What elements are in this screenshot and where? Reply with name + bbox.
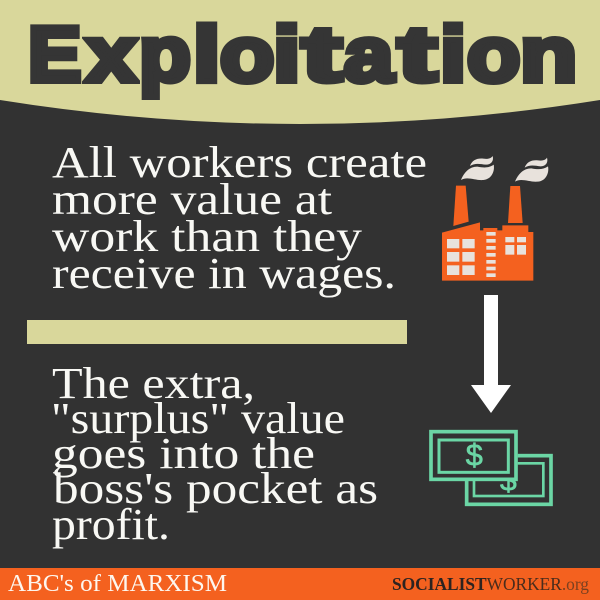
- title: p: [139, 10, 191, 98]
- icon: money: $: [500, 465, 517, 498]
- text block: workers create more value: more value at: [52, 175, 332, 224]
- header banner: [0, 0, 600, 124]
- title: E: [28, 10, 82, 98]
- icon: money: $: [466, 439, 483, 473]
- icon: smoke: [461, 156, 548, 182]
- title: t: [302, 10, 341, 98]
- footer series title: ABC's of MARXISM: [8, 571, 227, 597]
- text block: surplus value goes to the boss: goes into the: [52, 429, 315, 478]
- text block: surplus value goes to the boss: boss's pocket as: [53, 464, 378, 513]
- title: i: [440, 10, 466, 98]
- text block: surplus value goes to the boss: [51, 359, 378, 549]
- icon: money: [429, 430, 551, 504]
- footer band: [0, 568, 600, 600]
- icon: factory: [442, 156, 548, 281]
- title: i: [273, 10, 300, 98]
- title: t: [398, 10, 437, 98]
- footer site name: SOCIALISTWORKER.org: [392, 574, 589, 594]
- text block: workers create more value: All workers create: [52, 138, 427, 187]
- title: a: [344, 10, 394, 98]
- text block: workers create more value: work than they: [52, 212, 362, 261]
- title: [28, 10, 578, 100]
- title: n: [520, 10, 578, 98]
- title: x: [86, 10, 137, 98]
- title: l: [193, 10, 220, 98]
- text block: workers create more value: [52, 138, 427, 298]
- text block: surplus value goes to the boss: "surplus" value: [51, 394, 345, 443]
- text block: workers create more value: receive in wages.: [52, 249, 396, 298]
- arrow: factory to money: [471, 295, 511, 413]
- text block: surplus value goes to the boss: The extra,: [52, 359, 255, 408]
- divider bar: [27, 320, 407, 344]
- text block: surplus value goes to the boss: profit.: [52, 500, 170, 549]
- title: o: [467, 10, 520, 98]
- title: o: [220, 10, 274, 98]
